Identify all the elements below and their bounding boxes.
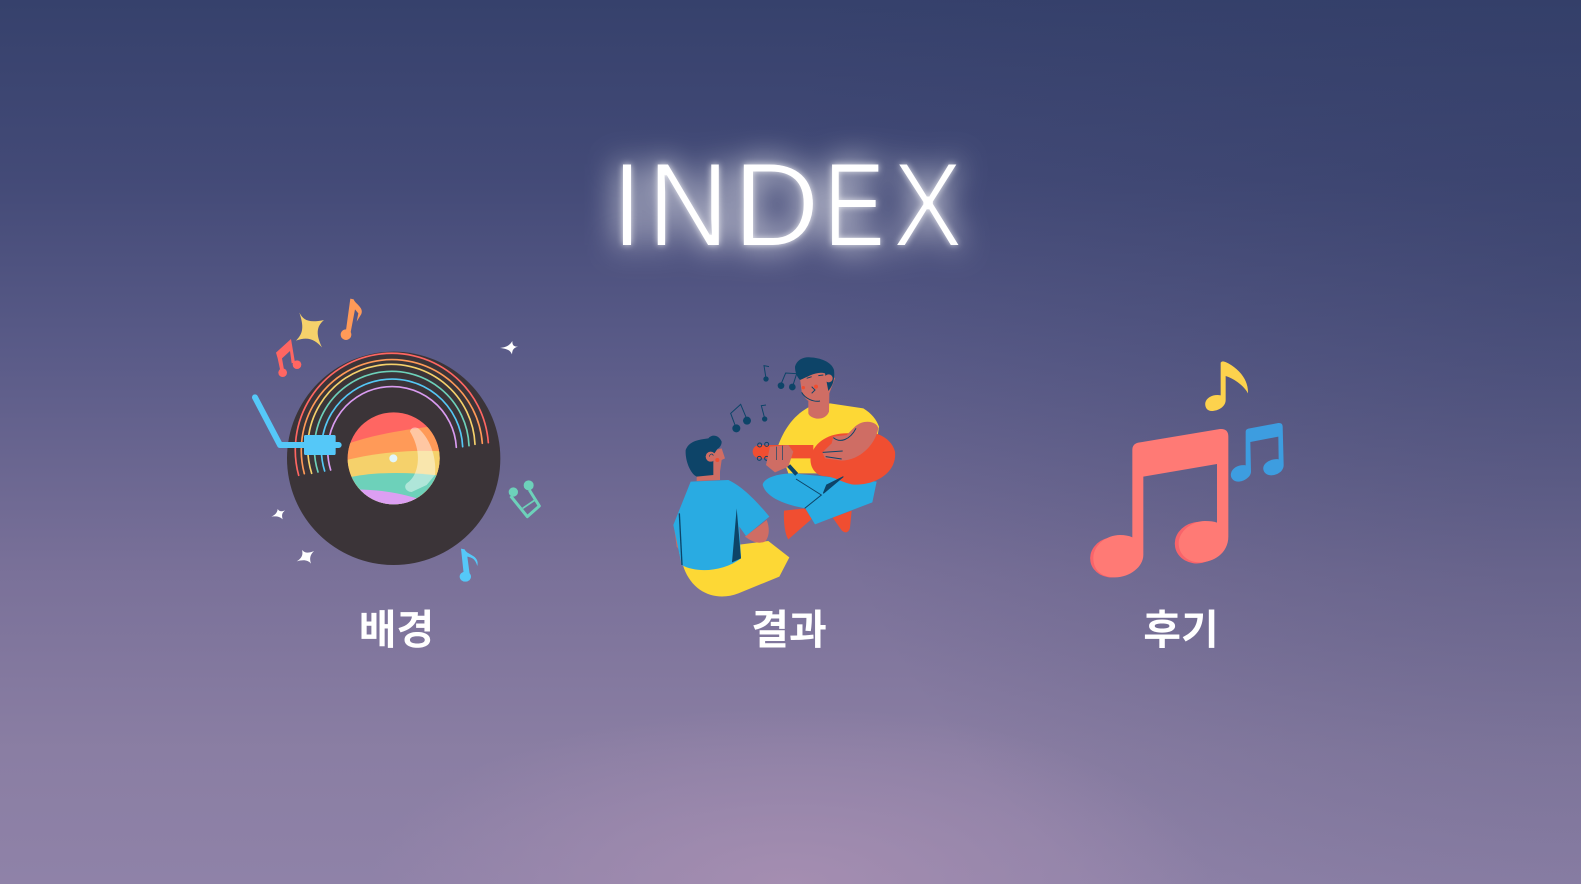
icon: music notes bbox=[1086, 361, 1284, 582]
title: N bbox=[648, 138, 729, 272]
guitarist arms and hands bbox=[766, 422, 878, 472]
guitarist shoes bbox=[784, 508, 852, 539]
rainbow grooves bbox=[295, 353, 488, 475]
label: 결과: 결과 bbox=[751, 607, 827, 653]
seated listener trousers bbox=[679, 541, 789, 596]
blue note bbox=[1231, 423, 1284, 482]
title: I bbox=[612, 139, 642, 272]
icon: teal earbuds note bbox=[509, 480, 539, 517]
label: 후기: 후기 bbox=[1143, 607, 1219, 653]
icon: rainbow vinyl record bbox=[255, 299, 539, 582]
guitarist shirt bbox=[778, 403, 879, 473]
tonearm bbox=[255, 397, 339, 455]
title: D bbox=[733, 138, 820, 272]
icon: blue note bbox=[460, 549, 478, 582]
seated listener head bbox=[686, 436, 725, 481]
icon: yellow sparkle bbox=[296, 313, 324, 347]
seated listener arms bbox=[674, 520, 769, 555]
seated listener shirt details bbox=[679, 508, 741, 565]
pink note bbox=[1086, 429, 1228, 582]
record disc bbox=[287, 352, 500, 565]
guitar bbox=[753, 432, 895, 485]
icon: orange note bbox=[341, 299, 362, 340]
title: X bbox=[892, 138, 963, 271]
yellow note bbox=[1205, 361, 1248, 411]
icon: red note bbox=[276, 339, 301, 377]
rainbow centre label bbox=[348, 412, 440, 504]
guitarist details bbox=[777, 428, 856, 508]
title: E bbox=[824, 137, 885, 272]
illustration: two people playing guitar bbox=[673, 357, 895, 596]
music notes bbox=[731, 366, 797, 432]
guitarist trousers bbox=[763, 473, 877, 524]
icon: white sparkles bbox=[271, 341, 518, 564]
label: 배경: 배경 bbox=[359, 607, 434, 653]
title bbox=[612, 137, 963, 272]
seated listener shirt bbox=[673, 480, 769, 570]
guitarist head bbox=[795, 357, 835, 419]
